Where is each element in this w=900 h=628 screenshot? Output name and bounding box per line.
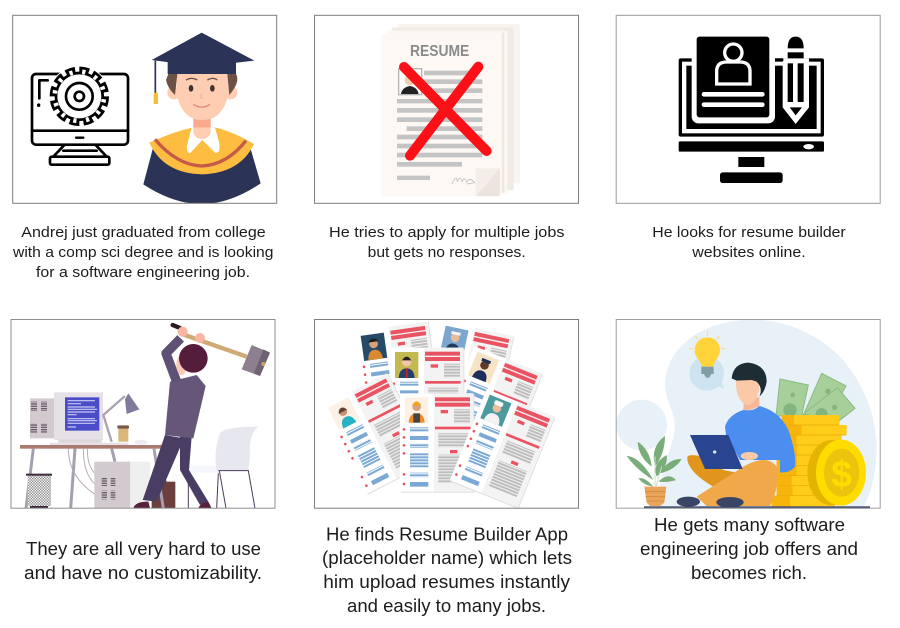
resume: chef [449, 389, 556, 509]
panel: resume builder app [314, 320, 578, 616]
caption: They are all very hard to use [26, 539, 261, 559]
frame [11, 320, 275, 508]
caption [640, 515, 858, 583]
resume: captain [441, 326, 514, 361]
resume: firefighter [360, 322, 432, 384]
bank note details [783, 389, 837, 420]
icon: bank notes [776, 373, 855, 421]
panel: frustrated with hammer [11, 320, 275, 583]
caption: engineering job offers and [640, 539, 858, 559]
resume: businessman [392, 348, 464, 396]
panel: job offers and riches [616, 319, 880, 583]
caption: Andrej just graduated from college [21, 224, 266, 241]
illustration: man smashing computer [20, 325, 270, 508]
icon: tower and briefcase [94, 449, 175, 508]
illustration: man with laptop and coins [616, 319, 877, 509]
icon: man with laptop [677, 363, 795, 508]
panel: graduate [12, 15, 277, 281]
illustration: graduate and computer [32, 33, 261, 204]
caption [652, 224, 846, 261]
icon: desk lamp [103, 393, 139, 442]
caption: websites online. [691, 244, 806, 261]
icon: dollar coin [807, 440, 866, 506]
front resume page: RESUME [410, 43, 469, 60]
icon: red cross [404, 67, 487, 156]
caption: and have no customizability. [24, 563, 262, 583]
resume: flight attendant [328, 373, 400, 495]
resume: police officer [464, 346, 543, 420]
frame [314, 15, 578, 203]
caption [12, 224, 273, 281]
caption: He looks for resume builder [652, 224, 846, 241]
icon: computer with resume and pencil [679, 37, 824, 183]
caption [329, 224, 564, 261]
floor [644, 506, 870, 509]
icon: man with sledgehammer [133, 325, 270, 508]
caption [322, 525, 572, 616]
icon: waste basket [26, 474, 52, 508]
illustration: fan of resumes [322, 321, 556, 509]
icon: light bulb [689, 331, 725, 391]
background blobs [616, 319, 877, 507]
caption [24, 539, 262, 583]
icon: chair [188, 427, 258, 508]
frame [616, 320, 880, 508]
frame [13, 15, 277, 203]
caption: him upload resumes instantly [323, 572, 570, 592]
frame [616, 15, 880, 203]
icon: desk and computer [20, 392, 171, 508]
caption: and easily to many jobs. [347, 596, 546, 616]
caption: He finds Resume Builder App [326, 525, 568, 545]
icon: coffee cup [117, 425, 148, 445]
frame [314, 320, 578, 508]
icon: coin stack [772, 415, 847, 506]
panel: resume builder websites [616, 15, 880, 261]
illustration: resume stack with red cross [381, 24, 520, 197]
caption: (placeholder name) which lets [322, 548, 572, 568]
caption: He tries to apply for multiple jobs [329, 224, 564, 241]
caption: but gets no responses. [368, 244, 526, 261]
panel: rejected resume [314, 15, 578, 261]
icon: dollar coin: $ [831, 453, 852, 495]
icon: potted plant [627, 436, 682, 506]
caption: for a software engineering job. [36, 264, 250, 281]
resume: construction worker [400, 393, 474, 493]
caption: becomes rich. [691, 563, 807, 583]
caption: with a comp sci degree and is looking [12, 244, 273, 261]
icon: monitor with gear [32, 66, 128, 165]
caption: He gets many software [654, 515, 845, 535]
icon: graduate in cap and gown [143, 33, 261, 204]
back pages [387, 24, 520, 193]
front resume page [381, 34, 502, 197]
